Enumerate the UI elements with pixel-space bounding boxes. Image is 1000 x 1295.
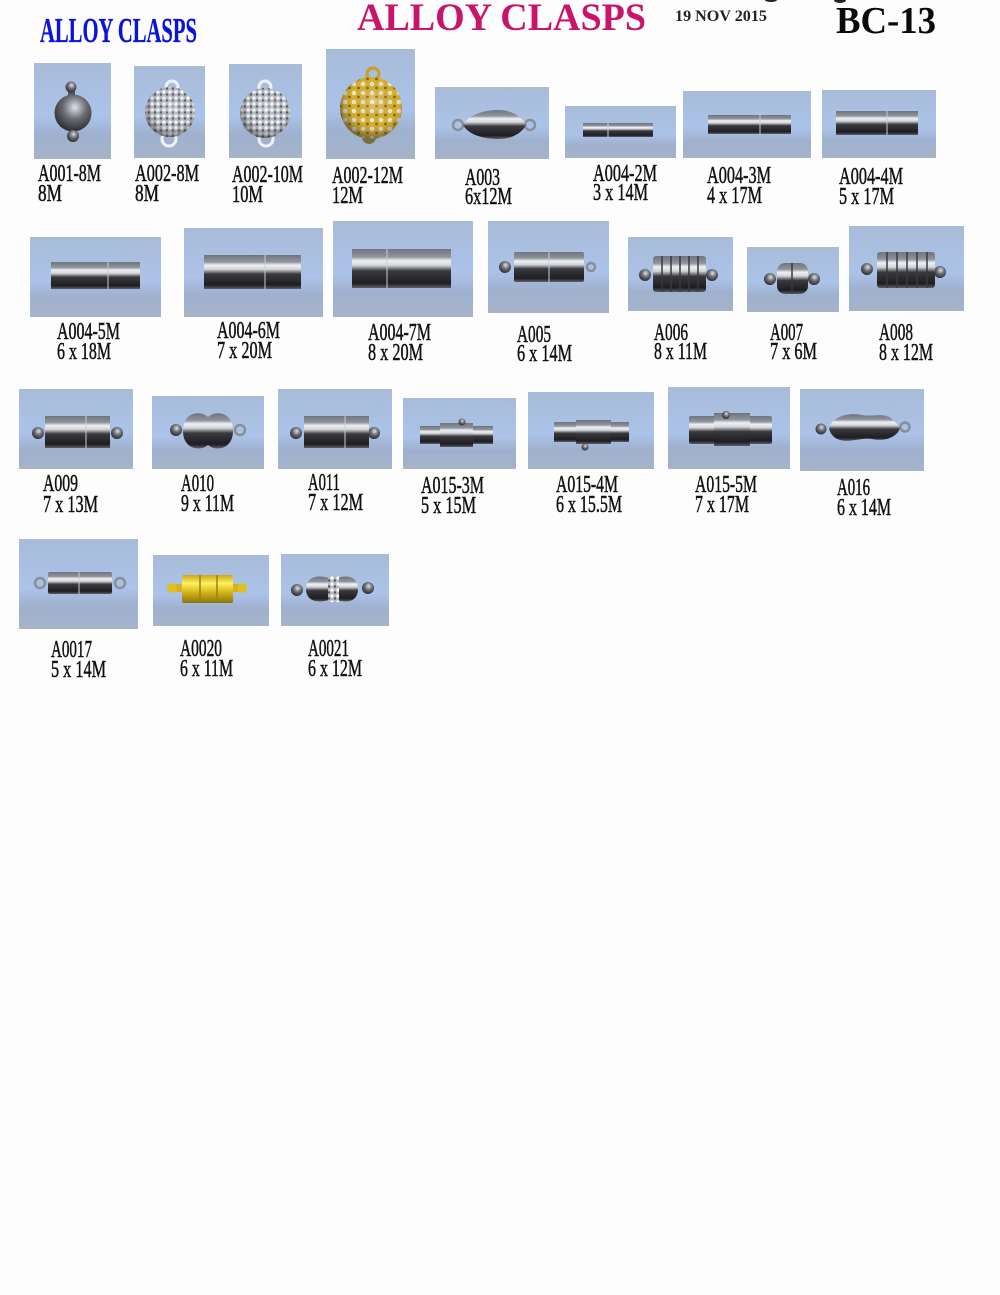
item: A002-12M: A002-12M xyxy=(332,163,403,189)
item: A006: 8 x 11M xyxy=(654,339,707,365)
item: A002-8M xyxy=(134,66,205,207)
item: A004-5M xyxy=(30,237,161,365)
item: A010: 9 x 11M xyxy=(181,491,234,517)
item: A001-8M xyxy=(34,63,111,207)
item: A004-3M xyxy=(683,91,811,209)
item: A015-4M: 6 x 15.5M xyxy=(556,492,622,518)
item: A0017: A0017 xyxy=(51,637,92,663)
item: A015-4M xyxy=(528,392,654,518)
item: A005 xyxy=(488,221,609,367)
item: A002-8M: A002-8M xyxy=(135,161,199,187)
item: A001-8M: 8M xyxy=(38,181,62,207)
item: A004-3M: 4 x 17M xyxy=(707,183,762,209)
item: A009: 7 x 13M xyxy=(43,492,98,518)
item: A006: A006 xyxy=(654,320,688,346)
item: A015-4M: A015-4M xyxy=(556,472,618,498)
item: A015-5M: 7 x 17M xyxy=(695,492,749,518)
item: A0021: A0021 xyxy=(308,636,349,662)
item: A002-10M: 10M xyxy=(232,182,263,208)
item: A004-4M xyxy=(822,90,936,210)
item: A005: 6 x 14M xyxy=(517,341,572,367)
item: A004-6M xyxy=(184,228,323,364)
item: A009: A009 xyxy=(43,471,78,497)
item: A0021 xyxy=(281,554,389,682)
item: A016 xyxy=(800,389,924,521)
item: A001-8M: A001-8M xyxy=(38,161,101,187)
item: A004-6M: 7 x 20M xyxy=(217,338,272,364)
item: A008 xyxy=(849,226,964,366)
item: A004-3M: A004-3M xyxy=(707,163,771,189)
catalogue code: BC-13 xyxy=(836,0,936,42)
item: A004-4M: 5 x 17M xyxy=(839,184,894,210)
item: A002-12M: 12M xyxy=(332,183,363,209)
item: A016: 6 x 14M xyxy=(837,495,891,521)
item: A004-2M xyxy=(565,106,676,206)
item: A008: A008 xyxy=(879,320,913,346)
clipped header fragments xyxy=(765,0,846,3)
item: A009 xyxy=(19,389,133,518)
item: A0020: A0020 xyxy=(180,636,222,662)
item: A002-10M: A002-10M xyxy=(232,162,303,188)
date: 19 NOV 2015 xyxy=(675,8,767,25)
item: A004-5M: A004-5M xyxy=(57,319,120,345)
item: A006 xyxy=(628,237,733,365)
item: A002-12M xyxy=(326,49,415,209)
item: A011: A011 xyxy=(308,470,340,496)
item: A007: A007 xyxy=(770,320,803,346)
item: A004-7M: 8 x 20M xyxy=(368,340,423,366)
item: A0017: 5 x 14M xyxy=(51,657,106,683)
heading: blue title: ALLOY CLASPS xyxy=(40,11,197,50)
item: A002-10M xyxy=(229,64,303,208)
item: A007: 7 x 6M xyxy=(770,339,817,365)
item: A015-5M xyxy=(668,387,790,518)
item: A015-3M: 5 x 15M xyxy=(421,493,476,519)
item: A0021: 6 x 12M xyxy=(308,656,362,682)
item: A003: A003 xyxy=(465,165,500,191)
item: A004-6M: A004-6M xyxy=(217,318,280,344)
item: A010: A010 xyxy=(181,471,214,497)
item: A015-5M: A015-5M xyxy=(695,472,757,498)
item: A004-4M: A004-4M xyxy=(839,164,903,190)
item: A0017 xyxy=(19,539,138,683)
item: A002-8M: 8M xyxy=(135,181,159,207)
item: A011 xyxy=(278,389,392,516)
item: A004-2M: A004-2M xyxy=(593,161,657,187)
item: A016: A016 xyxy=(837,475,870,501)
item: A004-5M: 6 x 18M xyxy=(57,339,111,365)
item: A0020 xyxy=(153,555,269,682)
item: A004-7M xyxy=(333,221,473,366)
item: A008: 8 x 12M xyxy=(879,340,933,366)
item: A011: 7 x 12M xyxy=(308,490,363,516)
item: A003 xyxy=(435,87,549,210)
item: A005: A005 xyxy=(517,322,551,348)
item: A004-7M: A004-7M xyxy=(368,320,431,346)
item: A0020: 6 x 11M xyxy=(180,656,233,682)
item: A007 xyxy=(747,247,839,365)
item: A010 xyxy=(152,396,264,517)
item: A003: 6x12M xyxy=(465,184,512,210)
item: A004-2M: 3 x 14M xyxy=(593,180,648,206)
item: A015-3M xyxy=(403,398,516,519)
item: A015-3M: A015-3M xyxy=(421,473,484,499)
